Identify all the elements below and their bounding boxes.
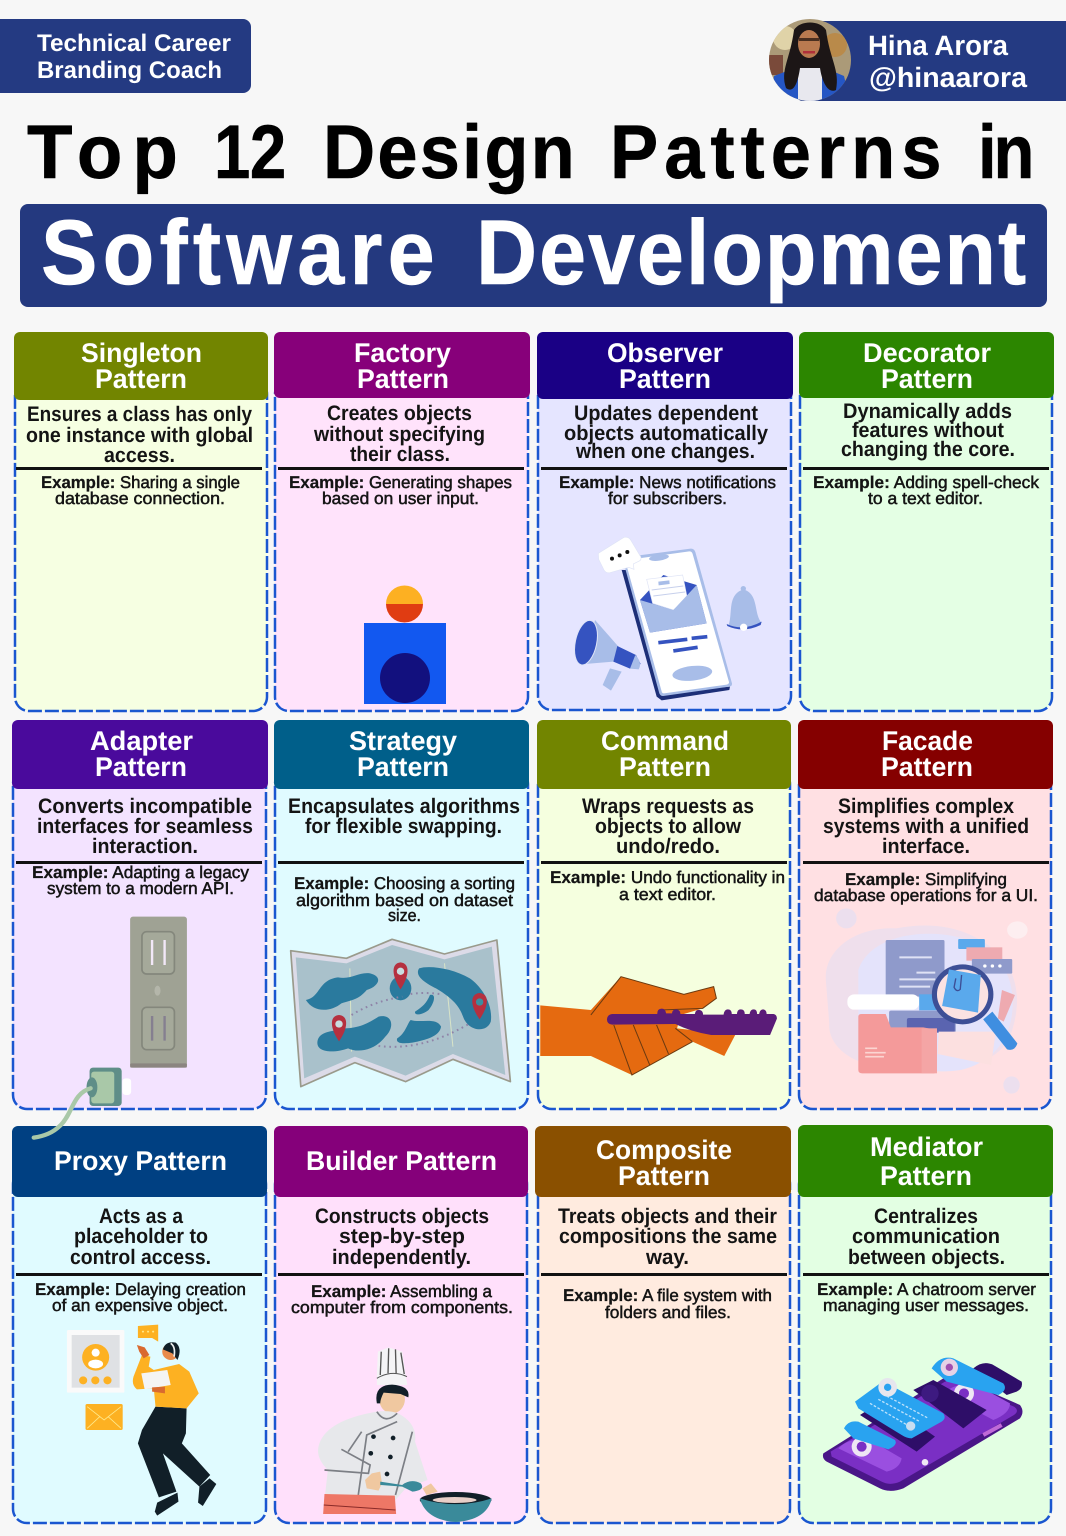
description: [313, 402, 485, 466]
header: proxy: [12, 1126, 267, 1197]
description: [564, 402, 768, 463]
example: to a text editor.: [868, 489, 983, 508]
header: facade: Pattern: [881, 752, 973, 782]
description: [26, 403, 253, 467]
title banner: software development: [20, 202, 1047, 307]
header: facade: [798, 720, 1053, 789]
header: facade: Facade: [882, 726, 973, 756]
header: command: Pattern: [619, 752, 711, 782]
header: adapter: [12, 720, 268, 789]
title: top 12 design patterns in: 12: [214, 110, 286, 195]
header: observer: Observer: [607, 338, 723, 368]
bell: [727, 586, 762, 631]
description: one instance with global: [26, 424, 253, 447]
icon: documents, folder and magnifier: [826, 908, 1028, 1094]
header: adapter: Adapter: [90, 726, 193, 756]
description: [288, 795, 520, 838]
description: independently.: [332, 1246, 471, 1269]
icon: isometric phone with chat bubbles: [823, 1358, 1022, 1491]
description: Updates dependent: [574, 402, 758, 425]
megaphone: [571, 618, 641, 691]
header: factory: [274, 332, 530, 398]
description: Creates objects: [327, 402, 472, 425]
example: computer from components.: [291, 1298, 513, 1317]
header: decorator: Pattern: [881, 364, 973, 394]
header: mediator: Mediator: [870, 1132, 983, 1162]
example: Example: Delaying creation: [35, 1280, 246, 1299]
header: strategy: Strategy: [349, 726, 457, 756]
description: step-by-step: [339, 1225, 465, 1248]
header: observer: [537, 332, 793, 399]
title banner: software development: Development: [476, 202, 1026, 304]
panel: factory pattern: [274, 332, 530, 711]
title: top 12 design patterns in: Top: [27, 110, 178, 195]
speech bubble: [598, 537, 641, 573]
description: interaction.: [92, 835, 198, 858]
example: for subscribers.: [608, 489, 727, 508]
badge: technical career branding coach: Technical Career: [37, 30, 231, 57]
description: access.: [104, 444, 175, 467]
header: observer: Pattern: [619, 364, 711, 394]
example: Example: Undo functionality in: [550, 868, 785, 887]
example: Example: Generating shapes: [289, 473, 512, 492]
description: [315, 1205, 489, 1269]
description: way.: [645, 1246, 689, 1269]
header: singleton: [14, 332, 268, 400]
example: system to a modern API.: [47, 879, 234, 898]
title: top 12 design patterns in: [27, 110, 1034, 195]
example: Example: News notifications: [559, 473, 776, 492]
header: builder: [274, 1126, 528, 1197]
example: Example: Adding spell-check: [813, 473, 1039, 492]
icon: plug cord: [34, 1088, 91, 1138]
header: composite: Pattern: [618, 1161, 710, 1191]
description: [823, 795, 1029, 858]
example: [814, 870, 1038, 905]
example: of an expensive object.: [52, 1296, 228, 1315]
example: algorithm based on dataset: [296, 891, 513, 910]
icon: chef cooking with a pan: [318, 1347, 492, 1522]
header: mediator: Pattern: [880, 1161, 972, 1191]
author banner: @hinaarora: [869, 62, 1027, 93]
example: [291, 1282, 513, 1317]
example: [32, 863, 249, 898]
description: Encapsulates algorithms: [288, 795, 520, 818]
example: [817, 1280, 1036, 1315]
description: features without: [852, 419, 1004, 442]
header: proxy: Proxy Pattern: [54, 1146, 227, 1176]
header: adapter: Pattern: [95, 752, 187, 782]
example: [563, 1286, 772, 1322]
description: Converts incompatible: [38, 795, 252, 818]
title banner: software development: Software: [41, 202, 435, 304]
example: size.: [388, 906, 421, 925]
description: for flexible swapping.: [305, 815, 502, 838]
header: factory: Pattern: [357, 364, 449, 394]
description: Acts as a: [99, 1205, 183, 1228]
panel: adapter pattern: [12, 720, 268, 1109]
example: folders and files.: [605, 1303, 731, 1322]
panel: observer pattern: [537, 332, 793, 710]
description: Simplifies complex: [838, 795, 1014, 818]
description: Wraps requests as: [582, 795, 754, 818]
example: Example: A chatroom server: [817, 1280, 1036, 1299]
title: top 12 design patterns in: in: [978, 110, 1034, 195]
example: database operations for a UI.: [814, 886, 1038, 905]
example: managing user messages.: [823, 1296, 1029, 1315]
icon: hand holding a key: [540, 977, 777, 1075]
title: top 12 design patterns in: Design: [323, 110, 575, 195]
panel: proxy pattern: [12, 1126, 267, 1523]
header: command: Command: [601, 726, 729, 756]
description: [841, 400, 1015, 461]
description: their class.: [350, 443, 450, 466]
icon: factory shapes: [364, 586, 446, 704]
description: systems with a unified: [823, 815, 1029, 838]
panel: singleton pattern: [14, 332, 268, 711]
icon: author portrait: [769, 19, 851, 101]
example: [294, 874, 515, 925]
example: [41, 473, 240, 508]
header: composite: [535, 1126, 791, 1197]
example: [813, 473, 1039, 508]
icon: wall outlet and plug: [87, 917, 187, 1106]
panel: command pattern: [537, 720, 791, 1109]
description: Treats objects and their: [558, 1205, 777, 1228]
icon: treasure map with pins: [291, 939, 510, 1087]
example: [35, 1280, 246, 1315]
header: builder: Builder Pattern: [306, 1146, 497, 1176]
description: [70, 1205, 211, 1269]
description: placeholder to: [74, 1225, 208, 1248]
badge: technical career branding coach: Branding Coach: [37, 57, 222, 84]
description: interface.: [882, 835, 970, 858]
example: Example: Choosing a sorting: [294, 874, 515, 893]
description: control access.: [70, 1246, 211, 1269]
author banner: Hina Arora: [868, 30, 1008, 61]
header: singleton: Singleton: [81, 338, 202, 368]
description: when one changes.: [575, 440, 755, 463]
description: objects automatically: [564, 422, 768, 445]
title: top 12 design patterns in: Patterns: [610, 110, 942, 195]
example: Example: A file system with: [563, 1286, 772, 1305]
description: [848, 1205, 1005, 1269]
header: factory: Factory: [354, 338, 451, 368]
example: [289, 473, 512, 508]
panel: facade pattern: [798, 720, 1053, 1109]
example: a text editor.: [619, 885, 716, 904]
header: decorator: [799, 332, 1054, 398]
description: Centralizes: [874, 1205, 978, 1228]
description: Ensures a class has only: [27, 403, 252, 426]
description: compositions the same: [559, 1225, 777, 1248]
header: strategy: [274, 720, 529, 789]
example: based on user input.: [322, 489, 479, 508]
panel: mediator pattern: [798, 1125, 1053, 1523]
header: mediator: [798, 1125, 1053, 1197]
description: [37, 795, 253, 858]
panel: strategy pattern: [274, 720, 529, 1109]
description: without specifying: [313, 423, 485, 446]
icon: person with laptop, profile card and envelope: [67, 1325, 216, 1516]
panel: builder pattern: [274, 1126, 528, 1523]
description: objects to allow: [595, 815, 742, 838]
badge: technical career branding coach: [0, 19, 251, 93]
example: [559, 473, 776, 508]
description: between objects.: [848, 1246, 1005, 1269]
description: interfaces for seamless: [37, 815, 253, 838]
example: [550, 868, 785, 904]
example: Example: Adapting a legacy: [32, 863, 249, 882]
header: decorator: Decorator: [863, 338, 991, 368]
header: strategy: Pattern: [357, 752, 449, 782]
description: undo/redo.: [616, 835, 720, 858]
description: changing the core.: [841, 438, 1015, 461]
icon: phone, megaphone and bell: [571, 537, 762, 700]
author banner: [769, 19, 1066, 101]
panel: composite pattern: [535, 1126, 791, 1523]
description: [582, 795, 754, 858]
example: database connection.: [55, 489, 225, 508]
header: composite: Composite: [596, 1135, 732, 1165]
description: communication: [852, 1225, 1000, 1248]
example: Example: Assembling a: [311, 1282, 493, 1301]
header: singleton: Pattern: [95, 364, 187, 394]
example: Example: Simplifying: [845, 870, 1007, 889]
description: Constructs objects: [315, 1205, 489, 1228]
header: command: [537, 720, 791, 789]
description: [558, 1205, 777, 1269]
panel: decorator pattern: [799, 332, 1054, 711]
example: Example: Sharing a single: [41, 473, 240, 492]
description: Dynamically adds: [843, 400, 1012, 423]
